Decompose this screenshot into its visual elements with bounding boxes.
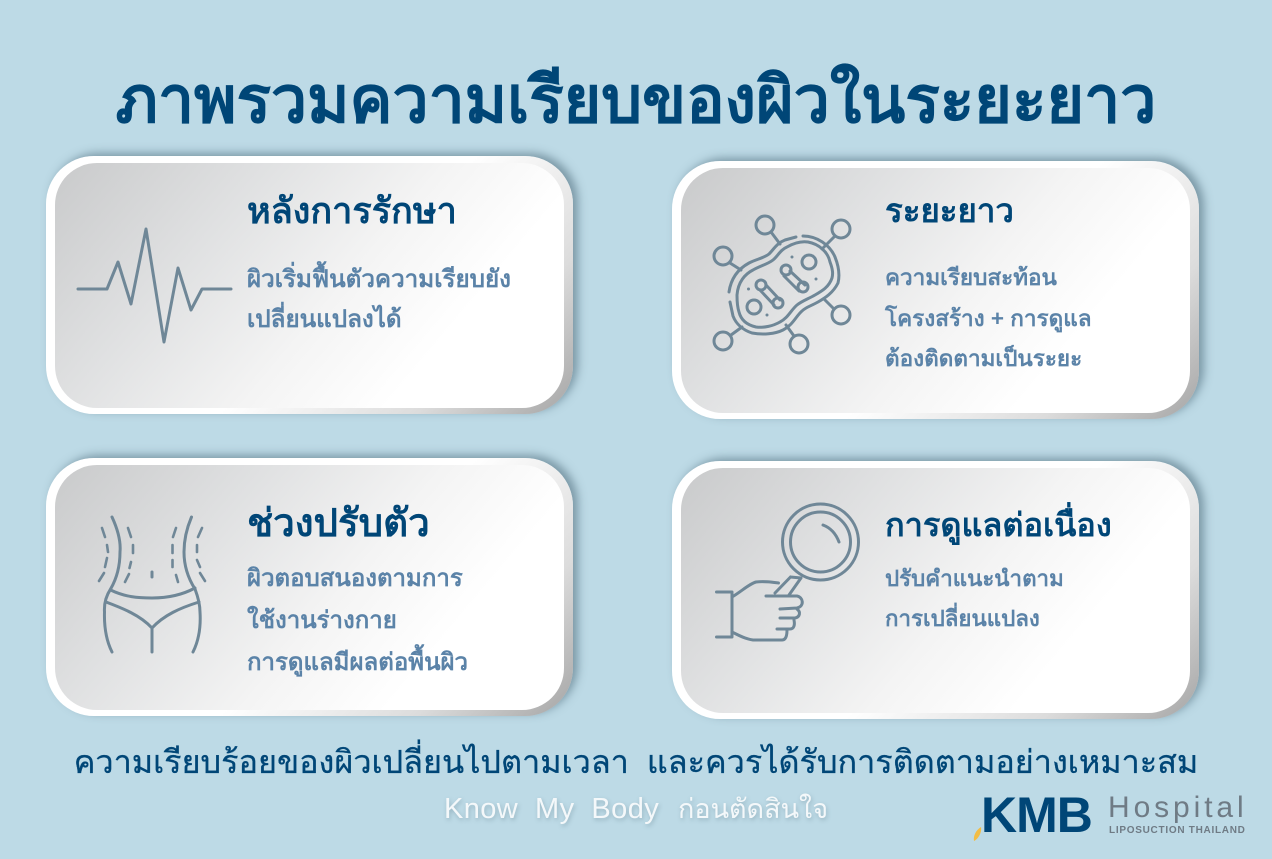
icon: heartbeat pulse bbox=[78, 229, 231, 342]
inner contour bbox=[737, 242, 833, 327]
panel: after treatment bbox=[46, 156, 573, 414]
caption: ความเรียบร้อยของผิวเปลี่ยนไปตามเวลา และควรได้รับการติดตามอย่างเหมาะสม bbox=[74, 744, 1198, 780]
text: adjustment period: ผิวตอบสนองตามการ bbox=[247, 565, 463, 592]
text: continuous care bbox=[885, 566, 1064, 631]
icon: magnifier in hand bbox=[716, 504, 858, 640]
text: adjustment period: ใช้งานร่างกาย bbox=[247, 607, 397, 634]
heading: after treatment: หลังการรักษา bbox=[247, 190, 457, 231]
logo: leaf accent bbox=[974, 827, 982, 841]
text: after treatment: เปลี่ยนแปลงได้ bbox=[247, 306, 402, 333]
tagline bbox=[444, 793, 828, 827]
logo: subtitle: LIPOSUCTION THAILAND bbox=[1109, 825, 1246, 836]
text: continuous care: ปรับคำแนะนำตาม bbox=[885, 566, 1064, 591]
panel face bbox=[55, 465, 564, 710]
panel: continuous care bbox=[672, 461, 1199, 719]
heading: adjustment period: ช่วงปรับตัว bbox=[247, 502, 430, 545]
outer contour bbox=[729, 236, 839, 334]
panel face bbox=[55, 163, 564, 408]
text: after treatment: ผิวเริ่มฟื้นตัวความเรียบยัง bbox=[247, 266, 511, 293]
panel: long term bbox=[672, 161, 1199, 419]
panel face bbox=[681, 168, 1190, 413]
text: after treatment bbox=[247, 261, 511, 333]
dumbbell 1 bbox=[760, 285, 780, 305]
panel: adjustment period bbox=[46, 458, 573, 716]
logo bbox=[974, 787, 1248, 843]
text: adjustment period bbox=[247, 565, 468, 677]
heading: continuous care: การดูแลต่อเนื่อง bbox=[885, 507, 1112, 543]
text: continuous care: การเปลี่ยนแปลง bbox=[885, 606, 1040, 631]
icon: microbe bbox=[714, 216, 850, 353]
dumbbell 2 bbox=[784, 271, 805, 291]
text: long term bbox=[884, 265, 1092, 371]
title: ภาพรวมความเรียบของผิวในระยะยาว bbox=[116, 64, 1156, 136]
text: long term: ต้องติดตามเป็นระยะ bbox=[885, 346, 1082, 371]
heading: long term: ระยะยาว bbox=[885, 192, 1014, 229]
text: adjustment period: การดูแลมีผลต่อพื้นผิว bbox=[247, 649, 468, 676]
text: long term: โครงสร้าง + การดูแล bbox=[885, 306, 1092, 330]
logo: KMB: KMB bbox=[981, 787, 1092, 843]
icon: waist bbox=[99, 517, 205, 652]
panel face bbox=[681, 468, 1190, 713]
tagline: Thai: ก่อนตัดสินใจ bbox=[678, 794, 828, 824]
logo: Hospital: Hospital bbox=[1108, 791, 1248, 824]
tagline: English: Know My Body bbox=[444, 793, 659, 825]
text: long term: ความเรียบสะท้อน bbox=[885, 265, 1057, 290]
